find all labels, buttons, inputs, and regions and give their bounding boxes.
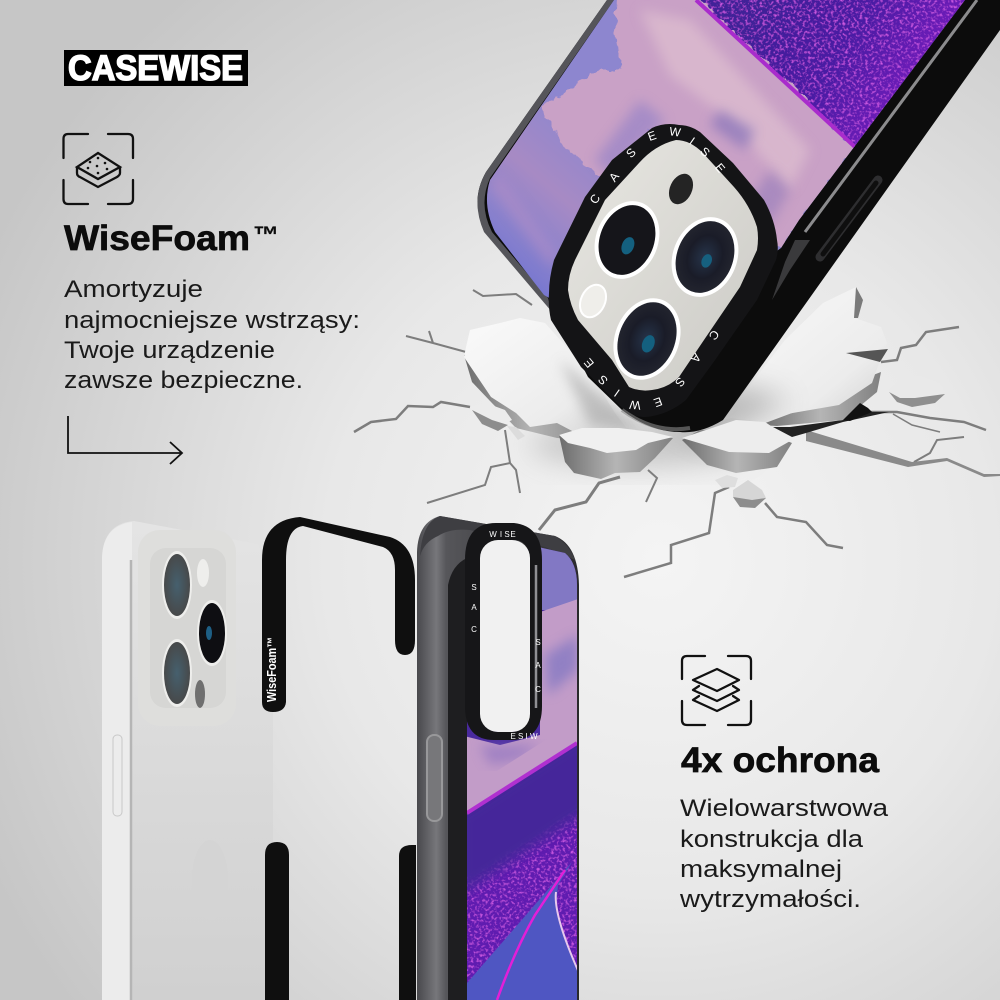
apple logo area bbox=[192, 840, 228, 920]
text block: 4x protection description: maksymalnej bbox=[680, 856, 842, 883]
ring lettering: I bbox=[500, 530, 502, 539]
text block: WiseFoam description: najmocniejsze wstrząsy: bbox=[64, 307, 360, 334]
dark field bbox=[467, 808, 577, 896]
cloud shadow bbox=[710, 110, 755, 150]
text block: WiseFoam description: zawsze bezpieczne. bbox=[64, 367, 303, 394]
case artwork bbox=[467, 548, 577, 1000]
crack shadow bbox=[773, 405, 889, 437]
cloud edge bbox=[467, 728, 577, 810]
lens: right bbox=[660, 207, 750, 307]
camera opening bbox=[480, 540, 530, 732]
lower phone: white iPhone bbox=[102, 521, 273, 1000]
WiseFoam liner bbox=[262, 517, 416, 1000]
slab: centre left bbox=[559, 428, 673, 479]
ring lettering: E bbox=[712, 160, 728, 176]
ring lettering: S bbox=[623, 145, 639, 161]
side button bbox=[820, 180, 878, 257]
flash bbox=[664, 170, 698, 208]
case artwork bbox=[486, 0, 965, 298]
lens bbox=[197, 600, 227, 666]
brand logo: CASEWISE bbox=[68, 49, 243, 88]
purple field bbox=[700, 0, 965, 148]
ring lettering: A bbox=[535, 661, 541, 670]
top lip bbox=[420, 516, 575, 560]
upper cloud mass bbox=[540, 0, 855, 250]
liner lower left bbox=[265, 842, 289, 1000]
icon: layers bbox=[682, 656, 751, 725]
camera bump bbox=[138, 530, 236, 726]
cloud shadow bbox=[754, 170, 791, 222]
wall cracks bbox=[354, 290, 986, 577]
lower phone: black case bbox=[417, 516, 590, 1000]
heading: WiseFoam: WiseFoam bbox=[64, 219, 250, 258]
microphone bbox=[195, 680, 205, 708]
ring lettering: E bbox=[652, 394, 664, 410]
ring highlight bbox=[535, 565, 537, 708]
camera plate bbox=[568, 140, 758, 391]
right crack wedge bbox=[806, 430, 1000, 477]
text block: WiseFoam description: Amortyzuje bbox=[64, 276, 203, 303]
text block: 4x protection description: konstrukcja dla bbox=[680, 826, 864, 853]
ring lettering: E bbox=[646, 128, 658, 144]
ring lettering: S bbox=[595, 372, 611, 388]
text block: 4x protection description: Wielowarstwowa bbox=[680, 795, 889, 822]
side strip bbox=[102, 522, 132, 1000]
road bbox=[467, 862, 580, 1000]
slab: left bbox=[464, 318, 628, 440]
ring lettering: S bbox=[697, 144, 713, 160]
sensor bbox=[575, 281, 611, 321]
side button bbox=[113, 735, 122, 816]
text block: 4x protection description: wytrzymałości. bbox=[679, 886, 861, 913]
magenta horizon bbox=[467, 743, 577, 813]
rock fragments bbox=[470, 376, 945, 508]
heading: WiseFoam: ™ bbox=[253, 222, 279, 249]
sky bands bbox=[494, 182, 556, 263]
heading: 4x ochrona: 4x ochrona bbox=[681, 741, 880, 780]
ring lettering: I bbox=[687, 134, 697, 148]
text block: WiseFoam description bbox=[64, 276, 360, 394]
phone body bbox=[477, 0, 1000, 432]
ring lettering: E S I W bbox=[510, 732, 538, 741]
ring lettering bbox=[581, 124, 728, 412]
arrow bbox=[68, 416, 182, 464]
flash bbox=[197, 559, 209, 587]
ring lettering: I bbox=[612, 386, 622, 400]
text block: 4x protection description bbox=[679, 795, 889, 913]
ring lettering: S bbox=[504, 530, 510, 539]
camera ring bbox=[465, 523, 542, 740]
ring lettering: W bbox=[668, 124, 682, 140]
translucent left bumper bbox=[477, 0, 614, 312]
phone back bbox=[102, 521, 273, 1000]
ring lettering: A bbox=[471, 603, 477, 612]
cloud highlights bbox=[640, 10, 810, 190]
phone contact shadow on left slab bbox=[560, 360, 640, 430]
camera ring bbox=[549, 124, 778, 417]
magenta horizon bbox=[696, 0, 855, 147]
side highlight bbox=[805, 0, 977, 232]
ring lettering: E bbox=[581, 355, 597, 371]
lens: bottom bbox=[602, 288, 692, 390]
text block: WiseFoam description: Twoje urządzenie bbox=[64, 337, 275, 364]
ring lettering: E bbox=[510, 530, 516, 539]
lower side highlight bbox=[772, 240, 810, 300]
liner top bbox=[262, 517, 415, 712]
ring lettering: C bbox=[587, 191, 603, 207]
ring lettering: W bbox=[489, 530, 497, 539]
liner lower right bbox=[399, 845, 416, 1000]
ring lettering: A bbox=[606, 170, 622, 184]
lens bbox=[162, 551, 192, 619]
cloud shadow bbox=[480, 745, 540, 765]
ring lettering bbox=[471, 530, 541, 741]
phone shadow bbox=[640, 385, 790, 445]
speckled field bbox=[467, 810, 577, 983]
inner dark band bbox=[448, 558, 467, 1000]
ring lettering: S bbox=[471, 583, 477, 592]
soft shadow under slabs bbox=[530, 423, 750, 467]
liner label: WiseFoam™ bbox=[265, 637, 279, 702]
ring lettering: S bbox=[535, 638, 541, 647]
ring lettering: C bbox=[471, 625, 477, 634]
ring lettering: A bbox=[688, 351, 704, 365]
lens bbox=[162, 639, 192, 707]
cloud shadow bbox=[595, 100, 665, 175]
clouds bbox=[467, 600, 577, 815]
ring lettering: S bbox=[672, 374, 688, 390]
icon: foam pad bbox=[64, 134, 133, 204]
bottom edge highlight bbox=[622, 410, 690, 429]
ring lettering: W bbox=[628, 397, 641, 412]
case body bbox=[417, 516, 579, 1000]
cloud shadow bbox=[545, 635, 578, 695]
ring lettering: C bbox=[535, 685, 541, 694]
top phone bbox=[470, 0, 1000, 445]
side button bbox=[427, 735, 442, 821]
lens: upper left bbox=[583, 191, 671, 289]
ring lettering: C bbox=[706, 327, 722, 343]
camera plateau bbox=[150, 548, 226, 708]
slab: centre right bbox=[682, 420, 792, 473]
slab: right bbox=[723, 287, 888, 426]
